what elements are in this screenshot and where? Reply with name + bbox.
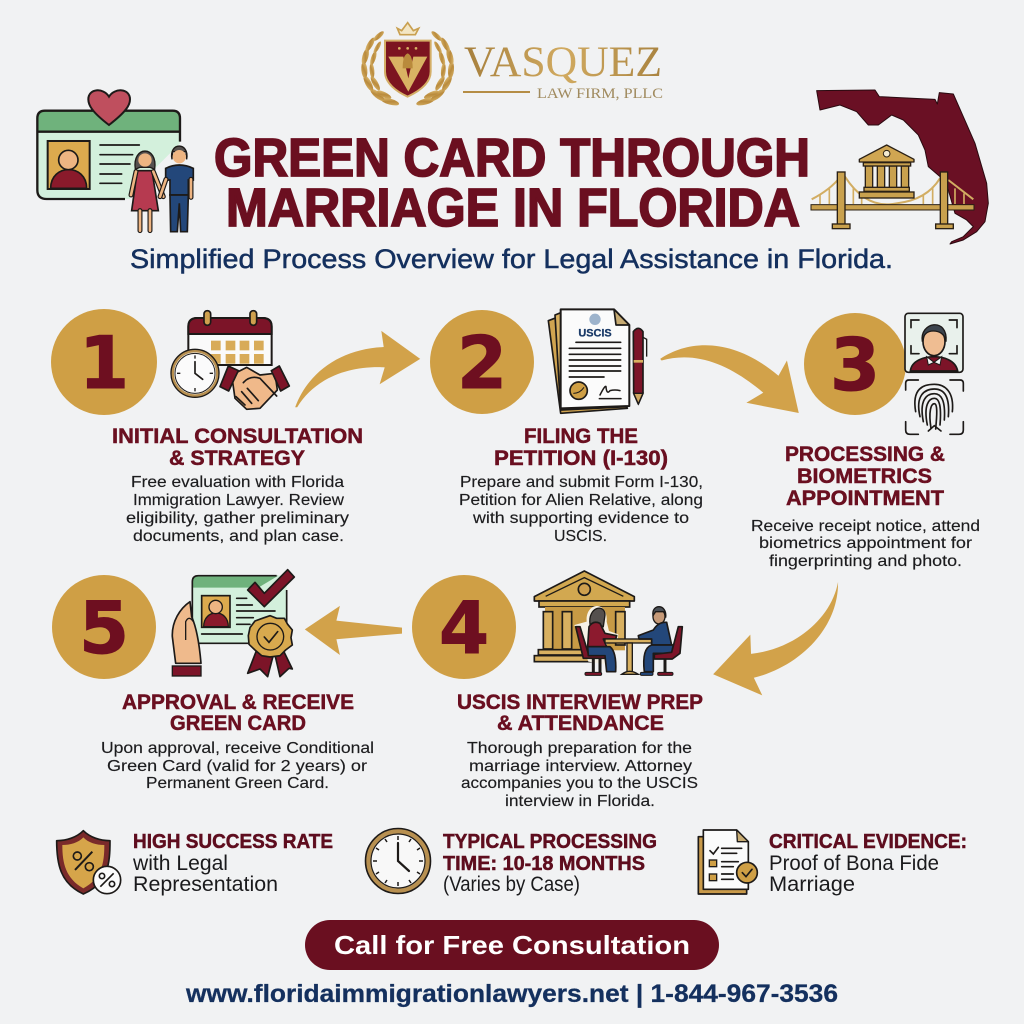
- heading 5: APPROVAL & RECEIVE: [122, 691, 354, 714]
- description 4: [461, 740, 698, 810]
- fact text: [769, 852, 939, 896]
- step 3: [751, 313, 980, 570]
- heading 1: [112, 425, 363, 470]
- icon: USCIS petition and pen: [548, 309, 647, 413]
- heading 4: [457, 691, 703, 735]
- description 1: Free evaluation with Florida: [131, 474, 344, 491]
- icon: USCIS petition and pen: USCIS: [578, 328, 612, 340]
- fact: success rate: [57, 831, 333, 896]
- fact text: Representation: [133, 873, 278, 896]
- step 1: [51, 309, 363, 545]
- description 3: biometrics appointment for: [759, 535, 973, 552]
- description 1: Immigration Lawyer. Review: [133, 492, 344, 509]
- description 3: [751, 518, 980, 570]
- description 4: Thorough preparation for the: [467, 740, 692, 757]
- heading 4: & ATTENDANCE: [497, 712, 664, 735]
- number badge 1: 1: [79, 321, 129, 405]
- fact text: (Varies by Case): [443, 873, 580, 896]
- step 5: [52, 570, 374, 792]
- number badge 2: [430, 310, 534, 414]
- description 2: USCIS.: [554, 528, 607, 545]
- heading 2: [494, 425, 668, 470]
- icon: ID card with couple: [37, 90, 193, 232]
- description 4: interview in Florida.: [505, 793, 655, 810]
- heading 4: USCIS INTERVIEW PREP: [457, 691, 703, 714]
- website and phone: www.floridaimmigrationlawyers.net | 1-844-967-3536: [185, 980, 838, 1008]
- number badge 4: 4: [439, 586, 489, 670]
- heading 3: BIOMETRICS: [797, 465, 932, 488]
- heading 1: INITIAL CONSULTATION: [112, 425, 363, 448]
- arrow: step 4 to 5: [305, 606, 402, 655]
- description 2: [459, 474, 703, 545]
- logo tagline: LAW FIRM, PLLC: [537, 86, 663, 102]
- icon: crest: [360, 23, 455, 107]
- description 1: [126, 474, 349, 545]
- fact text: Marriage: [769, 873, 855, 896]
- fact heading: TIME: 10-18 MONTHS: [443, 853, 645, 875]
- number badge 1: [51, 309, 157, 415]
- title: GREEN CARD THROUGH: [214, 128, 810, 188]
- fact text: [132, 852, 278, 896]
- description 2: Prepare and submit Form I-130,: [460, 474, 703, 491]
- logo wordmark: VASQUEZ: [464, 39, 662, 86]
- description 4: marriage interview. Attorney: [469, 758, 692, 775]
- description 5: [101, 740, 374, 792]
- icon: ID photo and fingerprint: [905, 313, 963, 434]
- arrow: step 3 to 4: [713, 582, 838, 695]
- fact: processing time: [366, 828, 657, 896]
- heading 3: [785, 443, 945, 510]
- heading 3: PROCESSING &: [785, 443, 945, 466]
- title: [214, 128, 810, 238]
- description 3: fingerprinting and photo.: [769, 553, 962, 570]
- icon: clock: [366, 828, 430, 894]
- number badge 4: [412, 575, 516, 679]
- description 2: with supporting evidence to: [472, 510, 689, 527]
- description 1: eligibility, gather preliminary: [126, 510, 349, 527]
- call to action button: [305, 920, 719, 970]
- description 3: Receive receipt notice, attend: [751, 518, 980, 535]
- subtitle: Simplified Process Overview for Legal Assistance in Florida.: [130, 244, 893, 274]
- heading 2: FILING THE: [524, 425, 638, 448]
- fact text: with Legal: [132, 852, 228, 875]
- arrow: step 2 to 3: [660, 345, 799, 413]
- fact heading: HIGH SUCCESS RATE: [133, 831, 333, 853]
- fact: critical evidence: [698, 830, 967, 896]
- heading 5: GREEN CARD: [170, 712, 306, 735]
- number badge 5: [52, 575, 156, 679]
- icon: approved green card: [172, 570, 294, 677]
- description 5: Green Card (valid for 2 years) or: [107, 758, 368, 775]
- heading 2: PETITION (I-130): [494, 447, 668, 470]
- fact heading: [443, 831, 657, 875]
- step 2: [430, 309, 703, 545]
- icon: checklist: [698, 830, 757, 894]
- number badge 5: 5: [79, 586, 129, 670]
- number badge 3: [804, 313, 906, 415]
- fact heading: TYPICAL PROCESSING: [443, 831, 657, 853]
- icon: calendar, clock, handshake: [171, 311, 289, 409]
- call to action button: Call for Free Consultation: [334, 930, 690, 960]
- icon: shield percent: [57, 831, 121, 894]
- number badge 3: 3: [830, 323, 880, 407]
- description 1: documents, and plan case.: [133, 528, 344, 545]
- description 5: Upon approval, receive Conditional: [101, 740, 374, 757]
- fact text: Proof of Bona Fide: [769, 852, 939, 875]
- description 2: Petition for Alien Relative, along: [459, 492, 703, 509]
- heading 1: & STRATEGY: [169, 447, 305, 470]
- title: MARRIAGE IN FLORIDA: [226, 178, 800, 238]
- description 5: Permanent Green Card.: [146, 775, 329, 792]
- fact heading: CRITICAL EVIDENCE:: [769, 831, 967, 853]
- heading 3: APPOINTMENT: [786, 487, 944, 510]
- step 4: [412, 571, 703, 810]
- arrow: step 1 to 2: [295, 331, 420, 407]
- icon: courthouse interview: [534, 571, 682, 675]
- number badge 2: 2: [457, 321, 507, 405]
- heading 5: [122, 691, 354, 735]
- description 4: accompanies you to the USCIS: [461, 775, 698, 792]
- logo: Vasquez Law Firm: [360, 23, 663, 107]
- icon: Florida map with bridge and courthouse: [811, 90, 988, 244]
